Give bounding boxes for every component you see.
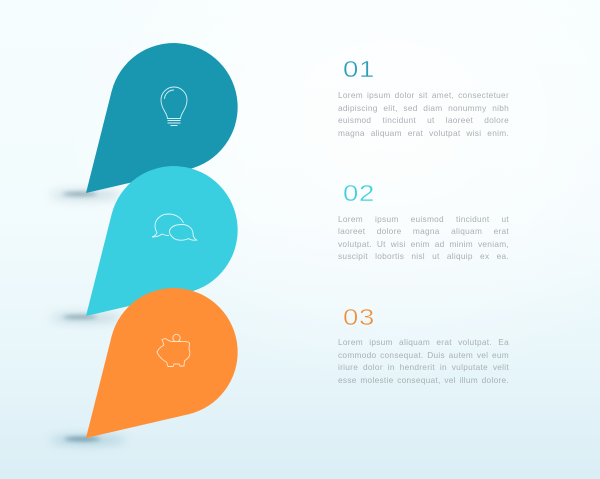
text block 2: Lorem ipsum euismod tincidunt ut bbox=[338, 214, 509, 224]
text block 1: adipiscing elit, sed diam nonummy nibh bbox=[338, 103, 509, 113]
floor shadow: pin 2 bbox=[50, 314, 122, 322]
floor shadow: pin 3 bbox=[50, 436, 126, 444]
text block 2 bbox=[338, 214, 509, 261]
icon: piggy bank bbox=[157, 334, 190, 366]
text block 2: laoreet dolore magna aliquam erat bbox=[338, 226, 509, 236]
pin 2: cyan bbox=[86, 166, 238, 316]
number 01: 01 bbox=[343, 56, 375, 82]
pin 3: orange bbox=[86, 288, 238, 438]
text block 3: esse molestie consequat, vel illum dolore. bbox=[338, 375, 509, 385]
text block 2: volutpat. Ut wisi enim ad minim veniam, bbox=[338, 239, 509, 249]
shadow cast on pin 1 bbox=[116, 161, 232, 179]
number 03: 03 bbox=[343, 304, 375, 330]
text block 1: Lorem ipsum dolor sit amet, consectetuer bbox=[338, 90, 509, 100]
shadow cast on pin 2 bbox=[116, 284, 232, 302]
text block 3: commodo consequat. Duis autem vel eum bbox=[338, 350, 509, 360]
text block 3 bbox=[338, 337, 509, 385]
floor shadow: pin 1 bbox=[50, 191, 122, 199]
text block 3: Lorem ipsum aliquam erat volutpat. Ea bbox=[338, 337, 509, 347]
text block 1 bbox=[338, 90, 509, 138]
text block 1: magna aliquam erat volutpat wisi enim. bbox=[338, 128, 509, 138]
icon: speech bubbles bbox=[152, 214, 196, 240]
text block 3: iriure dolor in hendrerit in vulputate velit bbox=[338, 362, 509, 372]
text block 2: suscipit lobortis nisl ut aliquip ex ea. bbox=[338, 251, 509, 261]
text block 1: euismod tincidunt ut laoreet dolore bbox=[338, 115, 509, 125]
icon: light bulb bbox=[161, 87, 187, 126]
pin 1: teal bbox=[86, 43, 238, 193]
number 02: 02 bbox=[343, 180, 375, 206]
